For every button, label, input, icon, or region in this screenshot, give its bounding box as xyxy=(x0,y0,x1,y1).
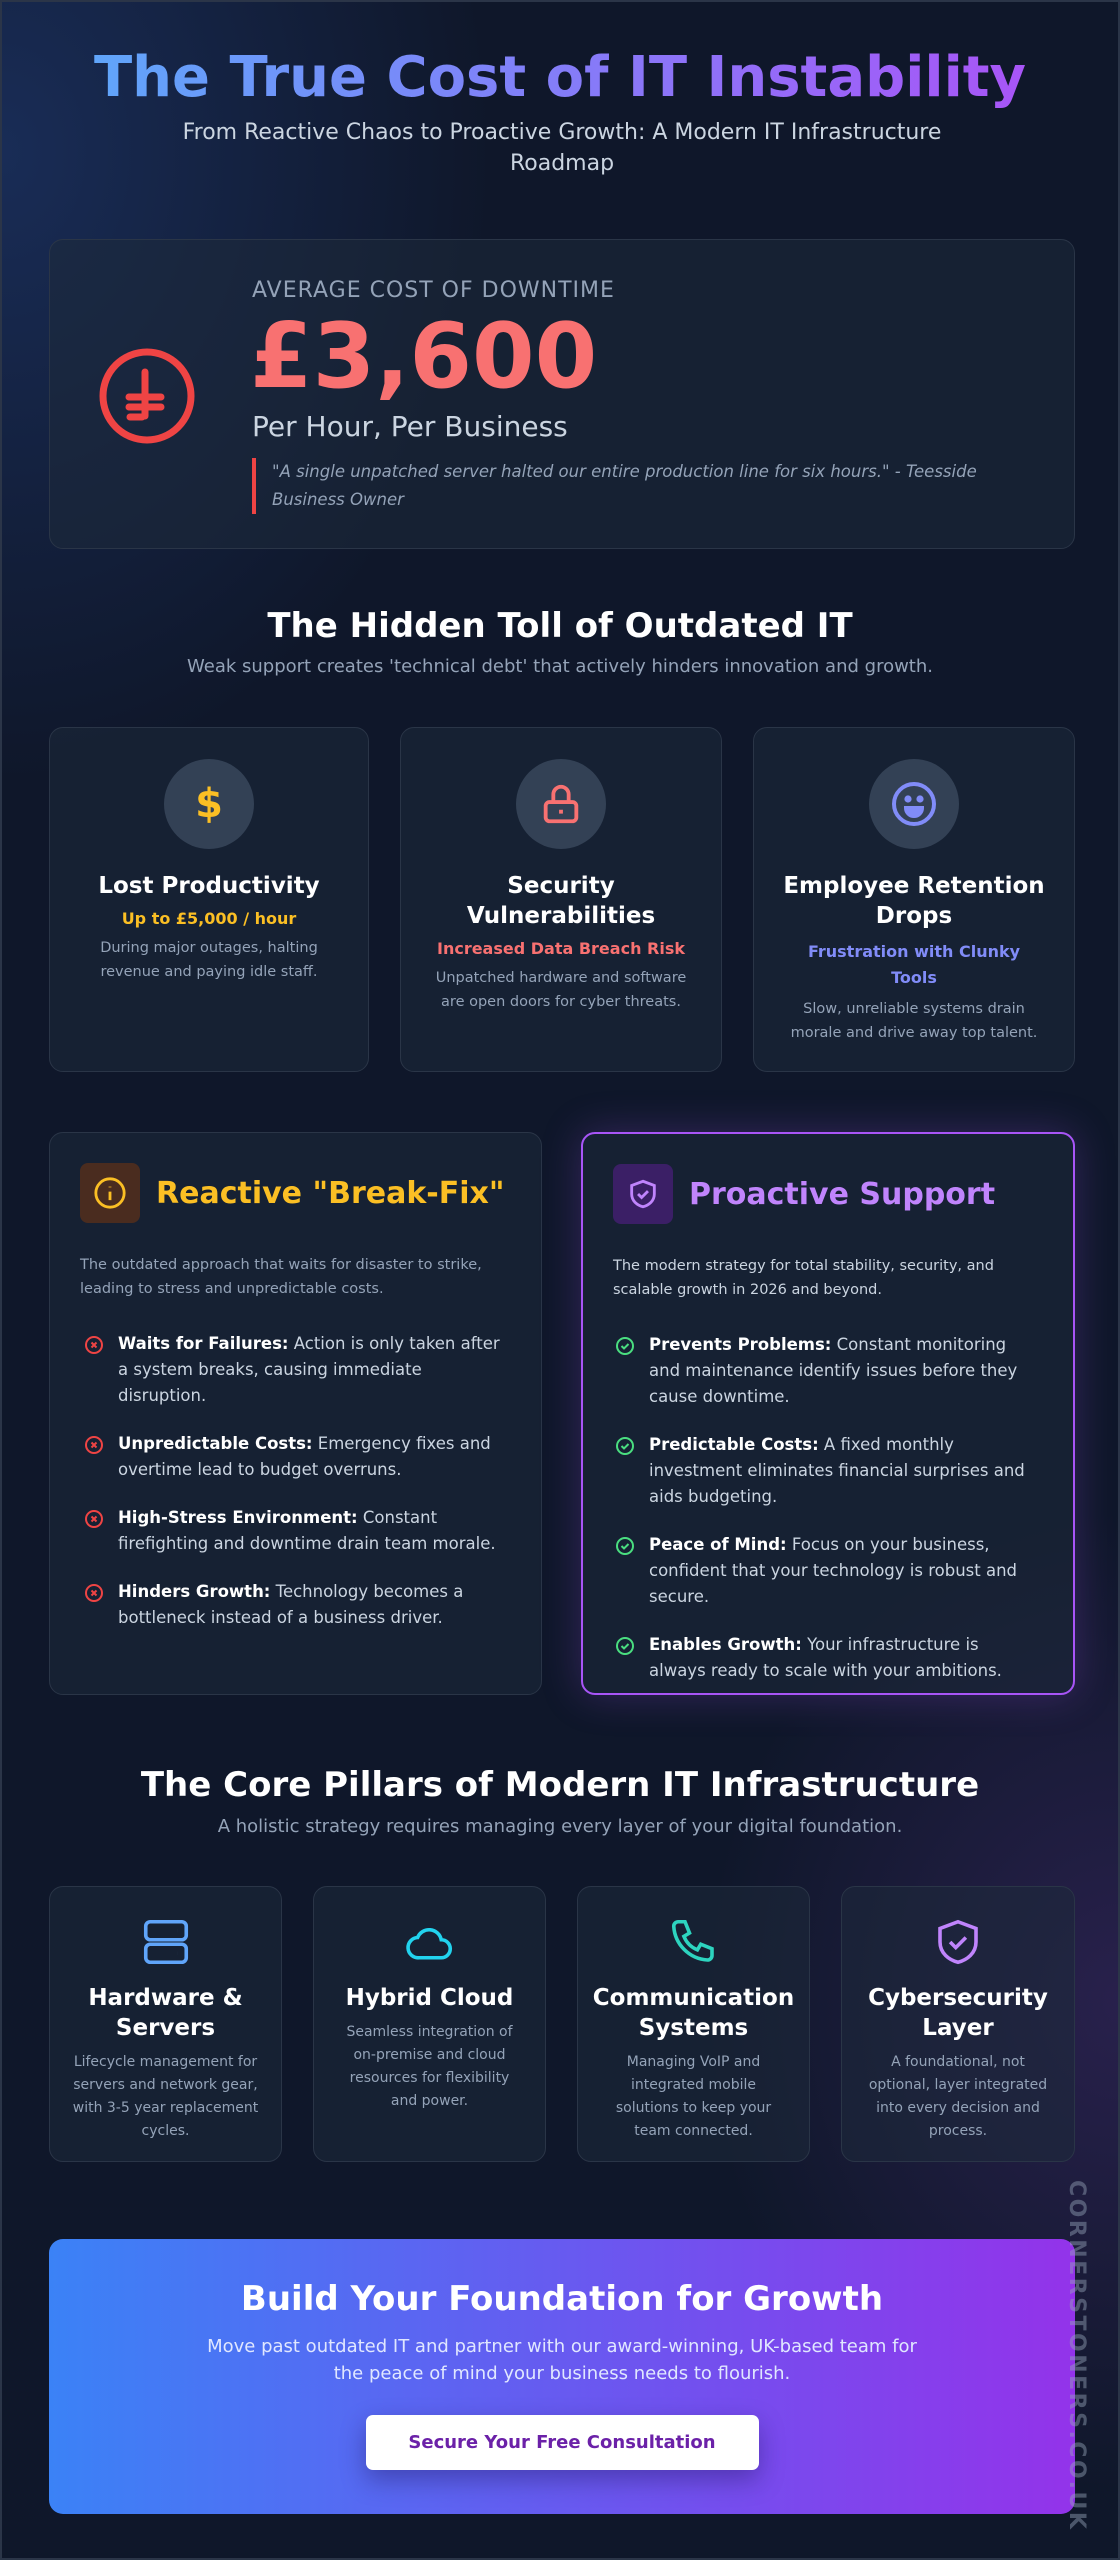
icon: cloud xyxy=(406,1928,452,1960)
subheading: Weak support creates 'technical debt' that actively hinders innovation and growth. xyxy=(187,656,933,677)
proactive header xyxy=(613,1164,995,1224)
pillar: communication xyxy=(577,1886,810,2162)
pillar: hardware: Lifecycle management for servers and network gear, with 3-5 year replacement cycles. xyxy=(73,2054,258,2139)
title: The True Cost of IT Instability xyxy=(94,45,1026,110)
panel: proactive: The modern strategy for total stability, security, and scalable growth in 2026 and beyond. xyxy=(613,1258,994,1298)
card: lost productivity: Lost Productivity xyxy=(98,873,320,899)
label: AVERAGE COST OF DOWNTIME xyxy=(252,278,615,303)
CTA banner xyxy=(49,2239,1075,2514)
pillar: hardware: Hardware & xyxy=(88,1985,243,2011)
CTA button xyxy=(366,2415,758,2470)
heading: hidden toll: The Hidden Toll of Outdated IT xyxy=(267,606,853,646)
panel: reactive xyxy=(49,1132,542,1695)
card: lost productivity: Up to £5,000 / hour xyxy=(122,909,296,928)
icon: currency down xyxy=(100,348,194,444)
hero card: downtime cost xyxy=(49,239,1075,549)
pillars subheading: A holistic strategy requires managing every layer of your digital foundation. xyxy=(218,1816,902,1837)
icon: money xyxy=(164,759,254,849)
pillar: communication: Communication xyxy=(593,1985,794,2011)
proactive list: Prevents Problems: Constant monitoring and maintenance identify issues before they cause downtime. xyxy=(649,1335,1017,1406)
card: security: Increased Data Breach Risk xyxy=(437,939,685,958)
reactive list: Waits for Failures: Action is only taken after a system breaks, causing immediate disruption. xyxy=(118,1334,500,1405)
icon: smile xyxy=(869,759,959,849)
card: retention: Tools xyxy=(891,968,937,987)
big number: £3,600 xyxy=(250,304,597,409)
reactive list: Hinders Growth: Technology becomes a bottleneck instead of a business driver. xyxy=(118,1582,463,1627)
icon: lock xyxy=(516,759,606,849)
card: security: Unpatched hardware and software are open doors for cyber threats. xyxy=(436,970,686,1010)
card: retention: Frustration with Clunky xyxy=(808,942,1020,961)
card: lost productivity: During major outages, halting revenue and paying idle staff. xyxy=(100,940,318,980)
pillar: hardware: Servers xyxy=(116,2015,215,2041)
icon: phone xyxy=(672,1920,714,1962)
pillar: cybersecurity: A foundational, not optional, layer integrated into every decision and process. xyxy=(869,2054,1047,2139)
card: retention: Drops xyxy=(876,903,952,929)
card: security xyxy=(400,727,722,1072)
pillar: communication: Systems xyxy=(639,2015,748,2041)
reactive list: Unpredictable Costs: Emergency fixes and overtime lead to budget overruns. xyxy=(118,1434,491,1479)
icon: shield xyxy=(938,1920,978,1964)
CTA button: Secure Your Free Consultation xyxy=(408,2432,716,2453)
reactive list: High-Stress Environment: Constant firefighting and downtime drain team morale. xyxy=(118,1508,496,1553)
proactive list: Peace of Mind: Focus on your business, confident that your technology is robust and secure. xyxy=(649,1535,1017,1606)
pillar: hardware xyxy=(49,1886,282,2162)
card: lost productivity xyxy=(49,727,369,1072)
CTA title: Build Your Foundation for Growth xyxy=(241,2279,883,2319)
pillar: cybersecurity xyxy=(841,1886,1075,2162)
pillar: communication: Managing VoIP and integrated mobile solutions to keep your team connected. xyxy=(616,2054,771,2139)
panel: proactive xyxy=(581,1132,1075,1695)
proactive list xyxy=(616,1335,1025,1680)
card: security: Vulnerabilities xyxy=(467,903,655,929)
subtitle: From Reactive Chaos to Proactive Growth: A Modern IT Infrastructure Roadmap xyxy=(183,120,941,176)
pillar: cybersecurity: Layer xyxy=(922,2015,994,2041)
quote: "A single unpatched server halted our entire production line for six hours." - Teesside Business Owner xyxy=(272,462,977,509)
card: security: Security xyxy=(507,873,615,899)
proactive header: Proactive Support xyxy=(689,1176,995,1212)
pillar: cloud xyxy=(313,1886,546,2162)
heading: core pillars: The Core Pillars of Modern IT Infrastructure xyxy=(141,1765,979,1805)
icon: server xyxy=(144,1920,188,1964)
icon: money: $ xyxy=(195,781,223,827)
reactive header: Reactive "Break-Fix" xyxy=(156,1176,504,1210)
panel: reactive: The outdated approach that waits for disaster to strike, leading to stress and unpredictable costs. xyxy=(80,1257,482,1297)
proactive list: Predictable Costs: A fixed monthly investment eliminates financial surprises and aids budgeting. xyxy=(649,1435,1025,1506)
card: retention: Employee Retention xyxy=(783,873,1045,899)
proactive list: Enables Growth: Your infrastructure is always ready to scale with your ambitions. xyxy=(649,1635,1002,1680)
card: retention: Slow, unreliable systems drain morale and drive away top talent. xyxy=(791,1001,1037,1041)
reactive header xyxy=(80,1163,504,1223)
reactive list xyxy=(85,1334,500,1627)
text: CORNERSTONERS.CO.UK xyxy=(1064,2180,1089,2531)
card: retention xyxy=(753,727,1075,1072)
CTA text: Move past outdated IT and partner with our award-winning, UK-based team for the peace of mind your business needs to flourish. xyxy=(207,2336,917,2384)
per hour: Per Hour, Per Business xyxy=(252,410,568,443)
pillar: cloud: Hybrid Cloud xyxy=(346,1985,513,2011)
pillar: cloud: Seamless integration of on-premise and cloud resources for flexibility and power. xyxy=(346,2024,513,2109)
pillar: cybersecurity: Cybersecurity xyxy=(868,1985,1048,2011)
